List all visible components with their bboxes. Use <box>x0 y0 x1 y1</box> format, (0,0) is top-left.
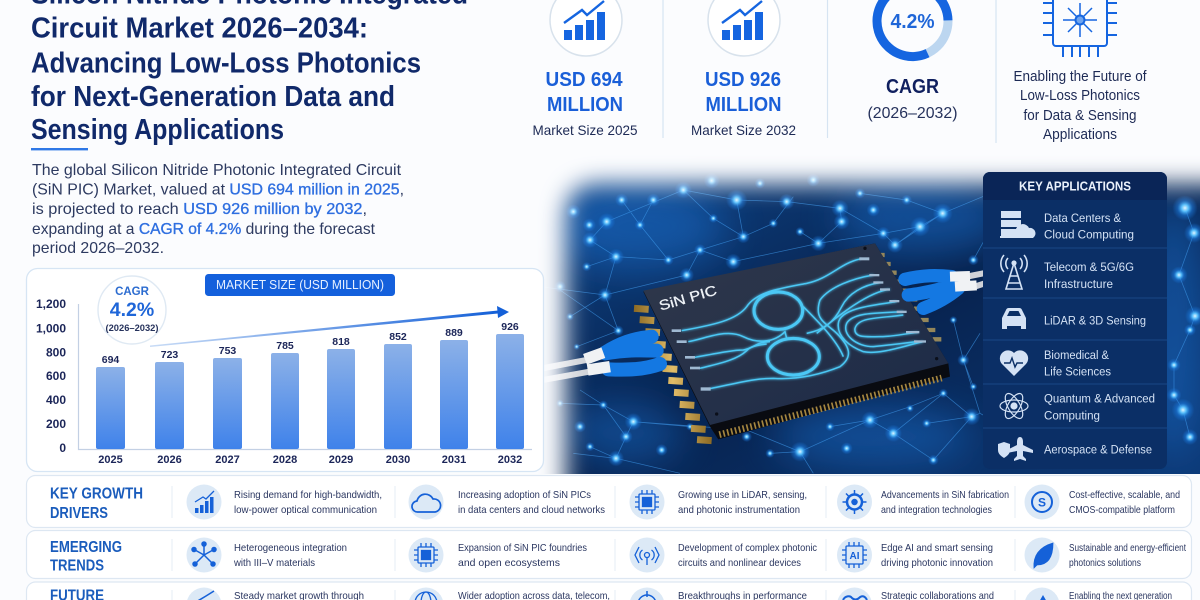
title: for Next-Generation Data and <box>31 81 395 113</box>
application: biomedical <box>1000 348 1111 378</box>
driver: fabrication advancements: Advancements in SiN fabrication <box>881 489 1009 501</box>
outlook: strategic collaborations <box>837 588 994 600</box>
stat: market size 2025: USD 694 <box>546 68 623 91</box>
application: telecom <box>1001 255 1134 291</box>
bar value labels: 694 <box>102 354 119 366</box>
year labels: 2027 <box>215 454 240 466</box>
chip bottom pins <box>719 378 942 435</box>
driver: fabrication advancements <box>837 484 1009 520</box>
stat: enabling the future: Applications <box>1043 127 1117 143</box>
bar value labels <box>102 321 519 366</box>
stat: enabling the future: for Data & Sensing <box>1024 108 1136 124</box>
growth arrow <box>150 306 509 347</box>
trend: foundries: Expansion of SiN PIC foundries <box>458 542 587 554</box>
intro paragraph: The global Silicon Nitride Photonic Integrated Circuit <box>32 162 402 179</box>
trend: edge AI: AI <box>850 551 860 562</box>
stat: market size 2025 <box>532 0 638 138</box>
driver: cost-effective platform: Cost-effective, scalable, and <box>1069 489 1180 501</box>
stat: market size 2032: MILLION <box>706 93 782 116</box>
axes <box>78 304 532 450</box>
trend: sustainability: photonics solutions <box>1069 558 1141 569</box>
application: biomedical: Life Sciences <box>1044 364 1111 378</box>
year labels <box>98 454 522 466</box>
year labels: 2026 <box>157 454 182 466</box>
bar value labels: 785 <box>276 340 294 352</box>
application: LiDAR <box>1002 308 1146 329</box>
hero image: SiN PIC chip on glowing network <box>530 150 1200 480</box>
intro paragraph: expanding at a CAGR of 4.2% during the forecast <box>32 221 376 238</box>
intro paragraph: is projected to reach USD 926 million by 2032, <box>32 201 367 218</box>
trend: foundries <box>408 538 587 572</box>
waveguides and ring resonators <box>682 259 923 389</box>
y axis labels: 800 <box>46 346 66 360</box>
trend: heterogeneous integration <box>186 538 347 572</box>
chip top surface <box>643 243 948 425</box>
driver: cost-effective platform <box>1024 484 1180 520</box>
chip label: SiN PIC <box>657 282 719 314</box>
y axis labels: 600 <box>46 369 66 383</box>
stat: market size 2025: MILLION <box>547 93 623 116</box>
stat: market size 2032: Market Size 2032 <box>691 122 796 138</box>
y axis labels: 200 <box>46 417 66 431</box>
y axis labels: 1,200 <box>36 297 66 311</box>
trend: heterogeneous integration: with III–V materials <box>233 557 315 569</box>
year labels: 2032 <box>498 454 522 466</box>
bar value labels: 889 <box>445 327 463 339</box>
stat: market size 2032: USD 926 <box>705 68 781 91</box>
panel: key growth drivers <box>26 476 1192 528</box>
intro paragraph: period 2026–2032. <box>32 240 164 257</box>
outlook: performance breakthroughs <box>630 588 807 600</box>
trend: complex circuits: Development of complex photonic <box>678 542 817 554</box>
panel: future outlook <box>26 582 1192 600</box>
trend: edge AI: Edge AI and smart sensing <box>881 542 993 554</box>
driver: cloud adoption: Increasing adoption of SiN PICs <box>458 489 591 501</box>
row heading <box>50 486 143 522</box>
CAGR badge: CAGR <box>115 286 150 298</box>
stat: CAGR donut: 4.2% <box>890 10 934 33</box>
CAGR badge: 4.2% <box>110 299 154 321</box>
y axis labels <box>36 297 66 455</box>
driver: cost-effective platform: S <box>1038 496 1046 510</box>
driver: cloud adoption <box>408 484 605 520</box>
application: quantum: Computing <box>1044 408 1100 422</box>
trend: complex circuits: circuits and nonlinear devices <box>678 557 801 569</box>
stat: CAGR donut <box>868 0 958 122</box>
application: data centers: Cloud Computing <box>1044 228 1134 242</box>
year labels: 2029 <box>329 454 353 466</box>
title: Circuit Market 2026–2034: <box>31 12 368 44</box>
trend: edge AI: driving photonic innovation <box>881 557 993 569</box>
application: LiDAR: LiDAR & 3D Sensing <box>1044 314 1146 328</box>
driver: cost-effective platform: CMOS-compatible platform <box>1069 504 1175 516</box>
title: Sensing Applications <box>31 114 284 146</box>
stat: enabling the future: Low-Loss Photonics <box>1020 88 1140 104</box>
CAGR badge: (2026–2032) <box>106 323 158 333</box>
stat: enabling the future <box>1014 0 1147 143</box>
intro paragraph <box>32 162 404 257</box>
title <box>31 0 468 146</box>
driver: LiDAR sensing: Growing use in LiDAR, sensing, <box>678 489 807 501</box>
fiber cables left <box>533 337 660 382</box>
intro paragraph: (SiN PIC) Market, valued at USD 694 million in 2025, <box>32 182 404 198</box>
title underline <box>31 148 88 150</box>
y axis labels: 1,000 <box>36 322 66 336</box>
outlook: next generation <box>1024 588 1172 600</box>
year labels: 2030 <box>386 454 410 466</box>
panel heading: KEY APPLICATIONS <box>1019 180 1131 194</box>
bar value labels: 723 <box>161 349 178 361</box>
application: quantum: Quantum & Advanced <box>1044 392 1155 406</box>
stat dividers <box>663 0 996 143</box>
application: telecom: Infrastructure <box>1044 277 1113 291</box>
row heading: EMERGING <box>50 539 122 556</box>
icon: growth chart <box>722 1 763 40</box>
row heading: KEY GROWTH <box>50 486 143 502</box>
application: data centers: Data Centers & <box>1044 211 1121 225</box>
bars <box>96 334 524 449</box>
application: aerospace: Aerospace & Defense <box>1044 442 1152 456</box>
stat: market size 2032 <box>691 0 796 138</box>
title: Advancing Low-Loss Photonics <box>31 48 421 80</box>
row heading: DRIVERS <box>50 505 108 522</box>
icon: photonic chip <box>1043 0 1117 57</box>
application: biomedical: Biomedical & <box>1044 348 1109 362</box>
panel: market size bar chart <box>26 268 544 472</box>
year labels: 2025 <box>98 454 123 466</box>
trend: sustainability <box>1024 538 1186 572</box>
stat: market size 2025: Market Size 2025 <box>532 122 638 138</box>
driver: bandwidth demand <box>186 484 382 520</box>
driver: LiDAR sensing: and photonic instrumentation <box>678 504 800 516</box>
driver: bandwidth demand: low-power optical communication <box>234 504 377 516</box>
bar value labels: 753 <box>219 345 236 357</box>
application: data centers <box>1000 211 1134 242</box>
chart heading pill: MARKET SIZE (USD MILLION) <box>216 277 384 292</box>
outlook: wider adoption <box>408 588 610 600</box>
trend: heterogeneous integration: Heterogeneous integration <box>234 542 347 554</box>
icon: growth chart <box>564 1 605 40</box>
driver: fabrication advancements: and integration technologies <box>881 504 992 516</box>
trend: edge AI <box>837 538 993 572</box>
bar value labels: 926 <box>501 321 519 333</box>
panel: emerging trends <box>26 530 1192 578</box>
year labels: 2031 <box>442 454 466 466</box>
chart heading pill <box>205 274 395 296</box>
panel: key applications <box>983 172 1167 469</box>
chip <box>634 243 950 441</box>
driver: cloud adoption: in data centers and cloud networks <box>458 504 605 516</box>
application: aerospace <box>998 437 1152 461</box>
driver: LiDAR sensing <box>630 484 807 520</box>
application: telecom: Telecom & 5G/6G <box>1044 260 1134 274</box>
bar value labels: 818 <box>332 336 350 348</box>
stat: CAGR donut: CAGR <box>886 76 939 98</box>
y axis labels: 0 <box>59 441 66 455</box>
chip right pins <box>877 255 941 339</box>
driver: bandwidth demand: Rising demand for high-bandwidth, <box>234 489 382 501</box>
CAGR badge <box>98 276 166 344</box>
chip left pins <box>634 308 712 441</box>
y axis labels: 400 <box>46 393 66 407</box>
year labels: 2028 <box>273 454 297 466</box>
application: quantum <box>1000 391 1155 422</box>
row heading <box>50 539 122 574</box>
stat: CAGR donut: (2026–2032) <box>868 105 958 122</box>
trend: foundries: and open ecosystems <box>458 557 560 569</box>
chip body side <box>643 243 950 439</box>
trend: complex circuits <box>630 538 817 572</box>
bar value labels: 852 <box>389 331 407 343</box>
fiber cables right <box>905 273 987 308</box>
outlook: steady growth <box>186 588 364 600</box>
row heading: TRENDS <box>50 558 104 574</box>
stat: enabling the future: Enabling the Future of <box>1014 69 1147 85</box>
